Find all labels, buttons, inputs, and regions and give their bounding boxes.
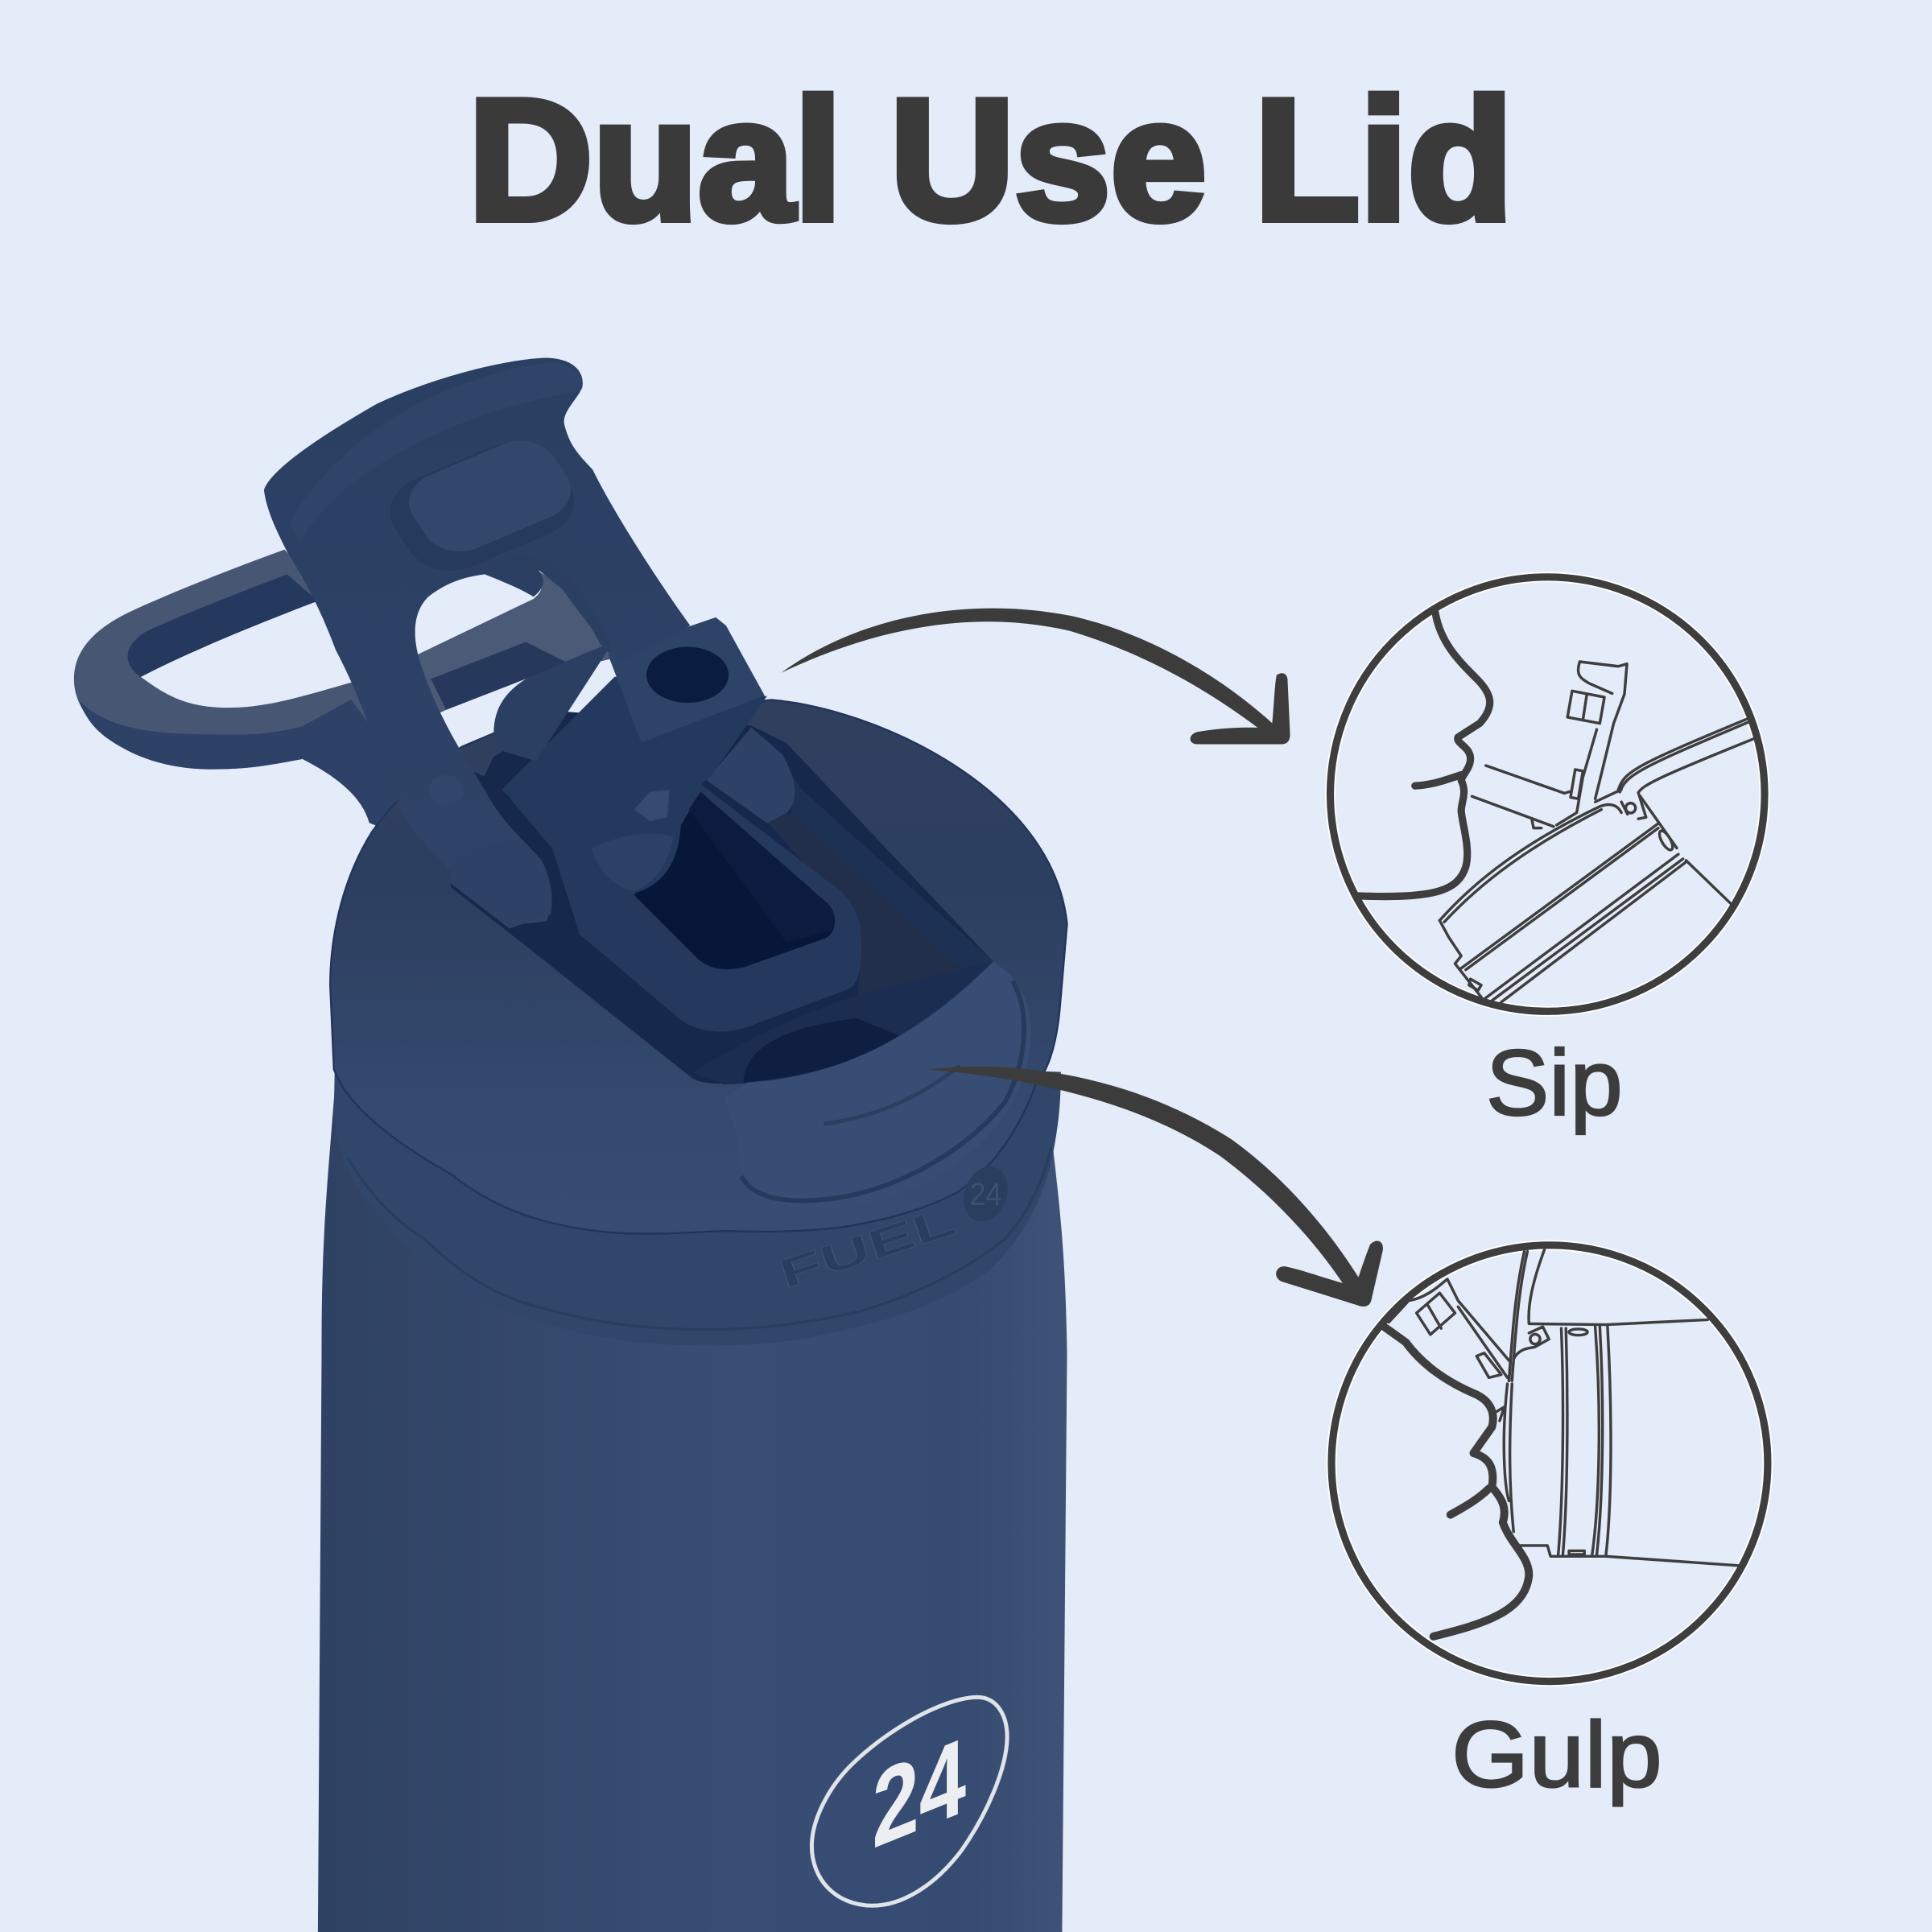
gulp illustration	[1331, 1245, 1768, 1682]
sip illustration	[1331, 577, 1765, 1011]
lid interior	[451, 677, 1031, 1209]
arrow to sip	[781, 609, 1290, 744]
arm	[264, 357, 690, 926]
tab groove	[741, 981, 1024, 1200]
sip ring outline	[1331, 577, 1765, 1011]
sip ring	[1331, 577, 1765, 1011]
left hinge	[451, 842, 552, 928]
arrow to gulp	[927, 1067, 1383, 1307]
drinking tab	[724, 962, 1031, 1209]
gulp bottle lines	[1389, 1250, 1739, 1566]
flip cap and spout	[264, 357, 765, 926]
handle loop	[74, 543, 690, 839]
gulp pocket	[693, 962, 993, 1084]
collar	[334, 1047, 1061, 1345]
spout ball highlight	[592, 834, 673, 891]
grey floor	[767, 813, 962, 1001]
lid	[330, 700, 1067, 1234]
bottle	[74, 357, 1067, 1932]
opening floor	[451, 712, 993, 1084]
lid mark 24: 24	[970, 1177, 1001, 1212]
FUEL emboss: FUEL	[774, 1197, 961, 1297]
bottle body	[318, 1084, 1067, 1932]
gulp label: Gulp	[1451, 1702, 1662, 1806]
spout neck	[502, 677, 767, 894]
sip bottle lines	[1439, 662, 1754, 1002]
sip label: Sip	[1486, 1030, 1623, 1135]
thumb pad	[374, 429, 590, 584]
gulp ring outline	[1331, 1245, 1768, 1682]
spout head face	[608, 617, 765, 743]
logo	[811, 1697, 1007, 1905]
arm rim	[290, 362, 581, 543]
spout nub	[634, 790, 670, 821]
rear spout flap	[493, 642, 613, 761]
pocket shadow	[744, 1018, 900, 1083]
collar ridge	[348, 1147, 1051, 1330]
tab line	[825, 1067, 958, 1124]
right inner wall	[751, 725, 993, 969]
sip face	[1356, 611, 1490, 897]
spout hole	[646, 647, 729, 703]
chute inner wall	[689, 792, 834, 942]
sip chute wall	[510, 784, 861, 1031]
lid mark 24	[956, 1160, 1015, 1228]
gulp face	[1384, 1327, 1529, 1637]
arm pin	[429, 775, 464, 805]
chute well	[634, 792, 835, 969]
logo: 24	[872, 1714, 966, 1872]
right hinge	[707, 728, 795, 823]
title: Dual Use Lid	[469, 64, 1513, 256]
gulp ring	[1331, 1245, 1768, 1682]
